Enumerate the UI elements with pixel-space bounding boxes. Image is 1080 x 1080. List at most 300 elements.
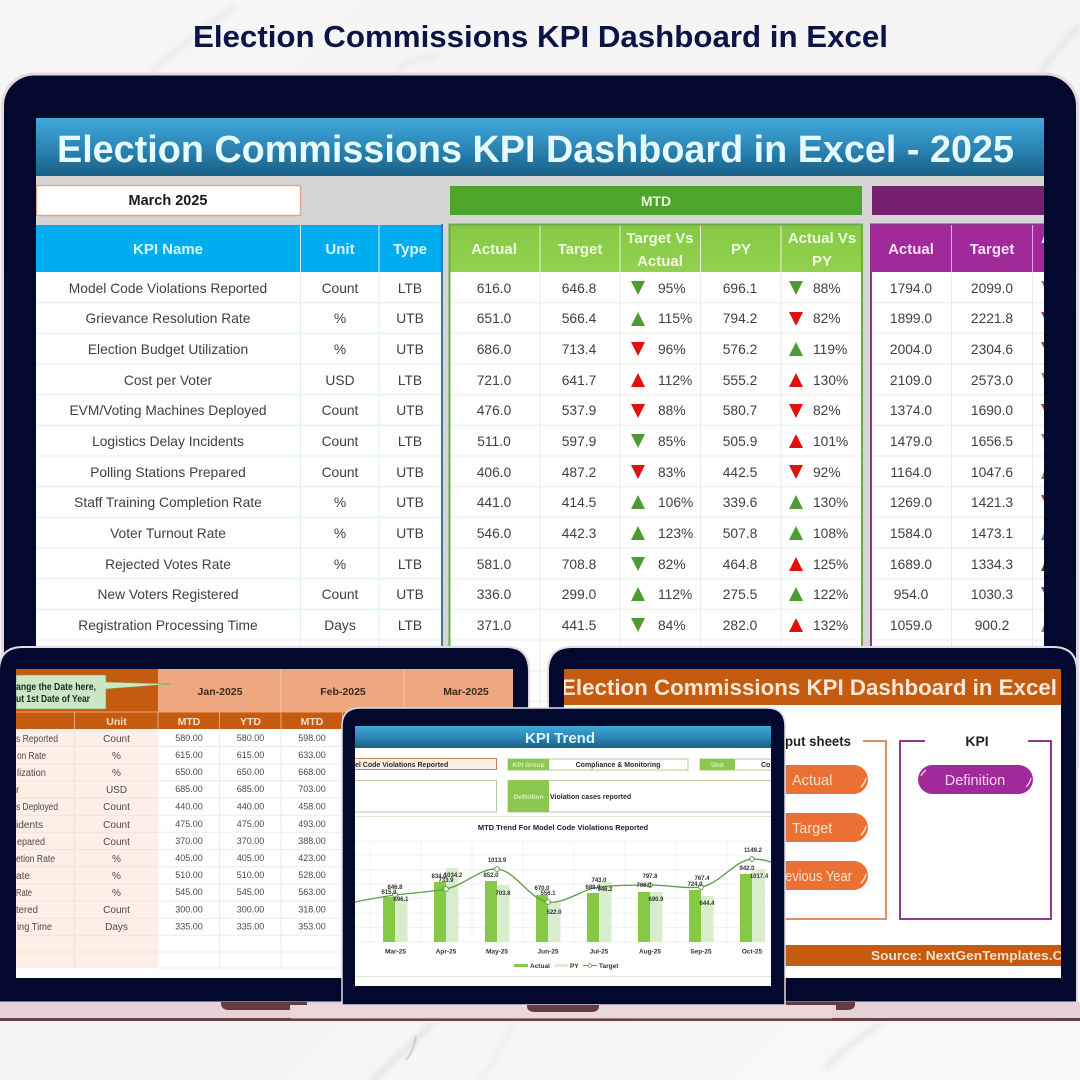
MTD table: 82% — [813, 311, 841, 326]
KPI group field: Compliance & Monitoring — [576, 762, 660, 769]
monthly values: 510.00 — [237, 870, 264, 880]
actual bars — [383, 874, 752, 942]
name and unit columns: etion Rate — [16, 854, 55, 865]
MTD table: 406.0 — [477, 465, 512, 480]
MTD table: 441.0 — [477, 495, 512, 510]
MTD table: 95% — [658, 281, 686, 296]
right laptop bezel — [548, 647, 1077, 1002]
YTD table: 2573.0 — [971, 373, 1013, 388]
KPI table: names, units and types: Staff Training Completion Rate — [74, 495, 262, 510]
MTD table: Target — [558, 241, 602, 258]
prior year bars — [395, 868, 765, 942]
right laptop: index sheet — [548, 647, 1080, 1002]
KPI table: names, units and types: Registration Processing Time — [78, 618, 258, 633]
KPI group field — [508, 759, 688, 770]
MTD band: MTD — [641, 193, 671, 209]
name and unit columns: r — [16, 785, 20, 796]
data labels: 670.0 — [534, 886, 550, 892]
data labels: 522.0 — [546, 910, 562, 916]
MTD table: 336.0 — [477, 587, 512, 602]
MTD table: 371.0 — [477, 618, 512, 633]
data labels: 1017.4 — [750, 874, 769, 880]
monthly values: 598.00 — [298, 733, 326, 743]
left laptop bezel — [0, 647, 529, 1002]
name and unit columns: % — [112, 751, 121, 762]
KPI trend banner: KPI Trend — [525, 730, 595, 747]
KPI table: names, units and types: % — [334, 311, 346, 326]
YTD table: 1269.0 — [890, 495, 932, 510]
YTD table: 2109.0 — [890, 373, 932, 388]
monthly values: 528.00 — [298, 870, 326, 880]
MTD table: 88% — [658, 403, 686, 418]
left laptop: target data sheet — [0, 647, 529, 1002]
KPI table: names, units and types: Election Budget Utilization — [88, 342, 248, 357]
MTD table: 546.0 — [477, 526, 512, 541]
unit field: Co — [761, 762, 770, 769]
right laptop screen — [561, 669, 1080, 978]
chart legend: Target — [599, 963, 619, 970]
MTD table: 708.8 — [562, 557, 597, 572]
data labels: 1034.2 — [444, 873, 463, 879]
YTD table: Actual — [888, 241, 934, 258]
KPI table: names, units and types: Type — [393, 241, 427, 258]
monthly values: 668.00 — [298, 767, 326, 777]
target line — [355, 857, 771, 904]
monthly values: 370.00 — [237, 836, 264, 846]
YTD table: 1334.3 — [971, 557, 1013, 572]
month axis labels: Mar-25 — [385, 948, 406, 956]
monthly values: 353.00 — [298, 922, 326, 932]
button: Actual — [786, 765, 868, 794]
MTD table: 299.0 — [562, 587, 597, 602]
data labels: 556.1 — [540, 891, 556, 897]
monthly values: 335.00 — [175, 922, 203, 932]
monthly values: 300.00 — [175, 904, 203, 914]
monthly values: 650.00 — [237, 767, 264, 777]
name and unit columns: Count — [103, 802, 130, 813]
monthly values: 423.00 — [298, 853, 326, 863]
month axis labels: Jun-25 — [538, 948, 559, 956]
data labels: 1013.9 — [488, 858, 507, 864]
MTD table: Actual Vs — [788, 230, 856, 247]
KPI table: names, units and types: LTB — [398, 281, 422, 296]
KPI table: names, units and types: UTB — [396, 342, 424, 357]
KPI table: names, units and types: Days — [324, 618, 356, 633]
KPI table: names, units and types: % — [334, 495, 346, 510]
monthly values: 633.00 — [298, 750, 326, 760]
name and unit columns: Count — [103, 837, 130, 848]
centre laptop screen — [350, 726, 778, 986]
MTD table: 85% — [658, 434, 686, 449]
MTD table: 476.0 — [477, 403, 512, 418]
MTD table: 487.2 — [562, 465, 596, 480]
name and unit columns: Count — [103, 734, 130, 745]
YTD table: 1584.0 — [890, 526, 932, 541]
monthly values: 580.00 — [237, 733, 264, 743]
KPI table: names, units and types: UTB — [396, 403, 424, 418]
button: Previous Year — [786, 861, 868, 890]
MTD table: 82% — [658, 557, 686, 572]
KPI table: names, units and types: % — [334, 526, 346, 541]
MTD table: 108% — [813, 526, 848, 541]
monthly values: 300.00 — [237, 904, 264, 914]
input sheets group — [786, 736, 887, 920]
MTD table: 96% — [658, 342, 686, 357]
KPI trend banner — [355, 726, 771, 748]
data labels: 696.1 — [393, 897, 409, 903]
main laptop bezel — [2, 74, 1078, 794]
monthly values: 335.00 — [237, 922, 264, 932]
data labels: 733.9 — [438, 878, 454, 884]
month axis labels — [385, 948, 762, 956]
KPI table: names, units and types: Count — [322, 587, 359, 602]
YTD table: 2004.0 — [890, 342, 932, 357]
month axis labels: Oct-25 — [742, 948, 762, 956]
MTD table: 713.4 — [562, 342, 597, 357]
YTD table: A — [1041, 230, 1052, 247]
YTD table: 1421.3 — [971, 495, 1013, 510]
status arrows — [631, 281, 803, 632]
MTD table: 555.2 — [723, 373, 757, 388]
name and unit columns: Count — [103, 820, 130, 831]
MTD table: 83% — [658, 465, 686, 480]
monthly values: 615.00 — [175, 750, 203, 760]
YTD table: 1899.0 — [890, 311, 932, 326]
monthly values: 493.00 — [298, 819, 326, 829]
data labels: 688.0 — [585, 885, 601, 891]
monthly values: 685.00 — [175, 784, 203, 794]
KPI name selector — [350, 758, 496, 770]
date selector — [36, 186, 300, 216]
KPI table: names, units and types: LTB — [398, 373, 422, 388]
name and unit columns: % — [112, 871, 121, 882]
button: Definition: Definition — [945, 773, 1005, 789]
month header: Feb-2025 — [320, 686, 366, 698]
YTD table: Target — [970, 241, 1014, 258]
column header: MTD — [301, 716, 324, 728]
chart legend: Actual — [530, 963, 550, 970]
MTD table: 92% — [813, 465, 841, 480]
laptop base — [0, 1002, 1080, 1023]
definition field — [508, 780, 778, 812]
left hinge — [221, 1002, 290, 1010]
trend chart — [355, 823, 771, 970]
MTD table: Actual — [637, 253, 683, 270]
YTD table — [870, 224, 1044, 646]
name and unit columns: ing Time — [17, 922, 52, 933]
MTD table: 112% — [658, 587, 692, 602]
monthly values: 440.00 — [175, 802, 203, 812]
monthly values — [158, 729, 342, 968]
data labels: 724.0 — [687, 882, 703, 888]
cropped YTD arrows — [1041, 281, 1044, 632]
definition field: Definition — [514, 794, 544, 801]
centre laptop hinge — [527, 1005, 599, 1012]
name and unit columns — [16, 729, 158, 968]
monthly values: 370.00 — [175, 836, 203, 846]
MTD table: 275.5 — [723, 587, 758, 602]
monthly values: 703.00 — [298, 784, 326, 794]
YTD table: 1473.1 — [971, 526, 1013, 541]
MTD table: 511.0 — [477, 434, 511, 449]
KPI table: names, units and types: Logistics Delay Incidents — [92, 434, 244, 449]
MTD table: 119% — [813, 342, 847, 357]
YTD table: 1164.0 — [890, 465, 932, 480]
unit field — [700, 759, 775, 770]
KPI table: names, units and types: Unit — [325, 241, 355, 258]
data labels — [381, 848, 769, 916]
button: Definition — [918, 765, 1033, 794]
data labels: 690.9 — [648, 897, 664, 903]
KPI table: names, units and types: LTB — [398, 557, 422, 572]
MTD table: 132% — [813, 618, 848, 633]
YTD table: 1656.5 — [971, 434, 1013, 449]
MTD band — [450, 186, 862, 215]
centre laptop: KPI trend — [342, 708, 785, 1012]
month axis labels: Sep-25 — [690, 948, 712, 956]
month axis labels: May-25 — [486, 948, 508, 956]
MTD table: 505.9 — [723, 434, 758, 449]
data labels: 615.0 — [381, 890, 397, 896]
KPI table: names, units and types: Grievance Resolution Rate — [86, 311, 251, 326]
KPI table: names, units and types: UTB — [396, 526, 424, 541]
name and unit columns: tered — [16, 905, 38, 916]
MTD table: 507.8 — [723, 526, 758, 541]
MTD table: 125% — [813, 557, 848, 572]
chart title: MTD Trend For Model Code Violations Reported — [478, 823, 649, 832]
MTD table: 442.5 — [723, 465, 758, 480]
MTD table: 339.6 — [723, 495, 758, 510]
MTD table: 576.2 — [723, 342, 757, 357]
MTD table: 646.8 — [562, 281, 597, 296]
main dashboard title banner: Election Commissions KPI Dashboard in Excel - 2025 — [57, 129, 1014, 171]
KPI table: names, units and types: Count — [322, 465, 359, 480]
name and unit columns: s Reported — [16, 734, 58, 745]
date selector: March 2025 — [128, 193, 208, 209]
YTD table: 1794.0 — [890, 281, 932, 296]
MTD table: 106% — [658, 495, 693, 510]
data labels: 743.0 — [591, 878, 607, 884]
chart legend: PY — [570, 963, 579, 970]
date callout: ut 1st Date of Year — [16, 694, 90, 705]
data labels: 644.4 — [699, 901, 715, 907]
left laptop screen — [16, 669, 513, 978]
month header: Mar-2025 — [443, 686, 489, 698]
name and unit columns: Rate — [16, 888, 32, 899]
data labels: 946.2 — [597, 887, 613, 893]
data labels: 852.0 — [483, 873, 499, 879]
MTD table: Target Vs — [626, 230, 694, 247]
YTD table: 1479.0 — [890, 434, 932, 449]
KPI table: names, units and types: New Voters Registered — [97, 587, 239, 602]
KPI table: names, units and types: UTB — [396, 465, 424, 480]
monthly values: 510.00 — [175, 870, 203, 880]
date callout: ange the Date here, — [16, 682, 96, 693]
month axis labels: Apr-25 — [436, 948, 457, 956]
monthly values: 440.00 — [237, 802, 264, 812]
KPI table: names, units and types: Model Code Violations Reported — [69, 281, 267, 296]
KPI table: names, units and types: % — [334, 342, 346, 357]
MTD table: 464.8 — [723, 557, 758, 572]
MTD table: 441.5 — [562, 618, 597, 633]
KPI table: names, units and types: EVM/Voting Machines Deployed — [69, 403, 267, 418]
KPI table: names, units and types: Rejected Votes Rate — [105, 557, 231, 572]
KPI table: names, units and types: LTB — [398, 434, 422, 449]
YTD table: 1030.3 — [971, 587, 1013, 602]
MTD table: 122% — [813, 587, 848, 602]
name and unit columns: % — [112, 854, 121, 865]
column header: YTD — [240, 716, 261, 728]
name and unit columns: s Deployed — [16, 802, 58, 813]
KPI table: names, units and types: Voter Turnout Rate — [110, 526, 226, 541]
MTD table: PY — [731, 241, 751, 258]
KPI group — [900, 733, 1051, 919]
index title banner: Election Commissions KPI Dashboard in Excel — [561, 675, 1057, 700]
MTD table — [449, 224, 862, 742]
name and unit columns: % — [112, 888, 121, 899]
MTD table: 130% — [813, 373, 848, 388]
MTD table: PY — [812, 253, 832, 270]
MTD table: 88% — [813, 281, 841, 296]
MTD table: 123% — [658, 526, 693, 541]
MTD table: 82% — [813, 403, 841, 418]
button: Previous Year: evious Year — [785, 869, 852, 885]
source band — [786, 945, 1061, 966]
MTD table: 696.1 — [723, 281, 757, 296]
data labels: 797.8 — [642, 874, 658, 880]
data labels: 942.0 — [739, 866, 755, 872]
month header: Jan-2025 — [198, 686, 243, 698]
monthly values: 475.00 — [175, 819, 203, 829]
right hinge — [785, 1002, 855, 1010]
month axis labels: Jul-25 — [590, 948, 609, 956]
data labels: 846.8 — [387, 885, 403, 891]
KPI table: names, units and types: Polling Stations Prepared — [90, 465, 246, 480]
YTD band — [872, 186, 1044, 215]
MTD table: 84% — [658, 618, 686, 633]
name and unit columns: ate — [16, 871, 30, 882]
MTD table: 651.0 — [477, 311, 512, 326]
KPI table: names, units and types — [36, 224, 443, 646]
main dashboard title banner — [36, 118, 1044, 176]
YTD table: 954.0 — [894, 587, 929, 602]
centre laptop base — [291, 1005, 832, 1019]
MTD table: 282.0 — [723, 618, 758, 633]
MTD table: 112% — [658, 373, 692, 388]
input sheets group: put sheets — [785, 733, 851, 749]
MTD table: 566.4 — [562, 311, 597, 326]
monthly values: 318.00 — [298, 904, 326, 914]
column header: MTD — [178, 716, 201, 728]
name and unit columns: % — [112, 768, 121, 779]
YTD table: 1374.0 — [890, 403, 932, 418]
MTD table: 130% — [813, 495, 848, 510]
monthly values: 405.00 — [237, 853, 264, 863]
monthly values: 615.00 — [237, 750, 264, 760]
column header: Unit — [106, 716, 127, 728]
monthly values: 405.00 — [175, 853, 203, 863]
MTD table: 580.7 — [723, 403, 757, 418]
monthly values: 685.00 — [237, 784, 264, 794]
YTD table: 1047.6 — [971, 465, 1013, 480]
monthly values: 650.00 — [175, 767, 203, 777]
data labels: 1149.2 — [744, 848, 763, 854]
name and unit columns: on Rate — [17, 751, 46, 762]
YTD table: 2221.8 — [971, 311, 1013, 326]
monthly values: 475.00 — [237, 819, 264, 829]
KPI group: KPI — [965, 733, 989, 749]
monthly values: 563.00 — [298, 887, 326, 897]
monthly values: 388.00 — [298, 836, 326, 846]
MTD table: Actual — [471, 241, 517, 258]
monthly values: 458.00 — [298, 802, 326, 812]
MTD table: 794.2 — [723, 311, 757, 326]
MTD table: 686.0 — [477, 342, 512, 357]
name and unit columns: idents — [16, 820, 43, 831]
definition field: Violation cases reported — [550, 794, 631, 801]
MTD table: 442.3 — [562, 526, 597, 541]
MTD table: 641.7 — [562, 373, 596, 388]
data labels: 767.4 — [694, 876, 710, 882]
YTD table: 1690.0 — [971, 403, 1013, 418]
KPI table: names, units and types: Cost per Voter — [124, 373, 212, 388]
KPI table: names, units and types: USD — [325, 373, 355, 388]
page title: Election Commissions KPI Dashboard in Excel — [193, 19, 888, 54]
centre laptop bezel — [342, 708, 785, 1005]
monthly values: 545.00 — [237, 887, 264, 897]
KPI table: names, units and types: Count — [322, 281, 359, 296]
MTD table: 414.5 — [562, 495, 597, 510]
MTD table: 115% — [658, 311, 692, 326]
YTD table: 900.2 — [975, 618, 1009, 633]
KPI group field: KPI Group — [512, 762, 545, 769]
data labels: 706.0 — [636, 883, 652, 889]
KPI table: names, units and types: LTB — [398, 618, 422, 633]
data labels: 703.8 — [495, 891, 511, 897]
KPI table: names, units and types: % — [334, 557, 346, 572]
YTD table: 2304.6 — [971, 342, 1013, 357]
name and unit columns: Count — [103, 905, 130, 916]
empty info box — [350, 780, 496, 812]
monthly values: 545.00 — [175, 887, 203, 897]
main laptop: MTD / YTD dashboard — [2, 74, 1078, 794]
KPI table: names, units and types: UTB — [396, 587, 424, 602]
MTD table: 721.0 — [477, 373, 512, 388]
MTD table: 597.9 — [562, 434, 597, 449]
YTD table: 1689.0 — [890, 557, 932, 572]
KPI table: names, units and types: KPI Name — [133, 241, 203, 258]
YTD table: 1059.0 — [890, 618, 932, 633]
YTD table: 2099.0 — [971, 281, 1013, 296]
MTD table: 537.9 — [562, 403, 597, 418]
name and unit columns: lization — [17, 768, 46, 779]
main laptop screen — [36, 118, 1052, 742]
data labels: 834.0 — [431, 874, 447, 880]
column header — [16, 712, 346, 729]
unit field: Unit — [711, 762, 725, 769]
KPI name selector: el Code Violations Reported — [355, 762, 448, 769]
index title banner — [561, 669, 1061, 705]
source band: Source: NextGenTemplates.Com — [871, 948, 1080, 963]
MTD table: 616.0 — [477, 281, 512, 296]
chart legend — [514, 963, 619, 970]
date callout — [16, 675, 171, 709]
MTD table: 101% — [813, 434, 848, 449]
month header — [158, 669, 513, 712]
KPI table: names, units and types: UTB — [396, 311, 424, 326]
month axis labels: Aug-25 — [639, 948, 661, 956]
KPI table: names, units and types: Count — [322, 403, 359, 418]
